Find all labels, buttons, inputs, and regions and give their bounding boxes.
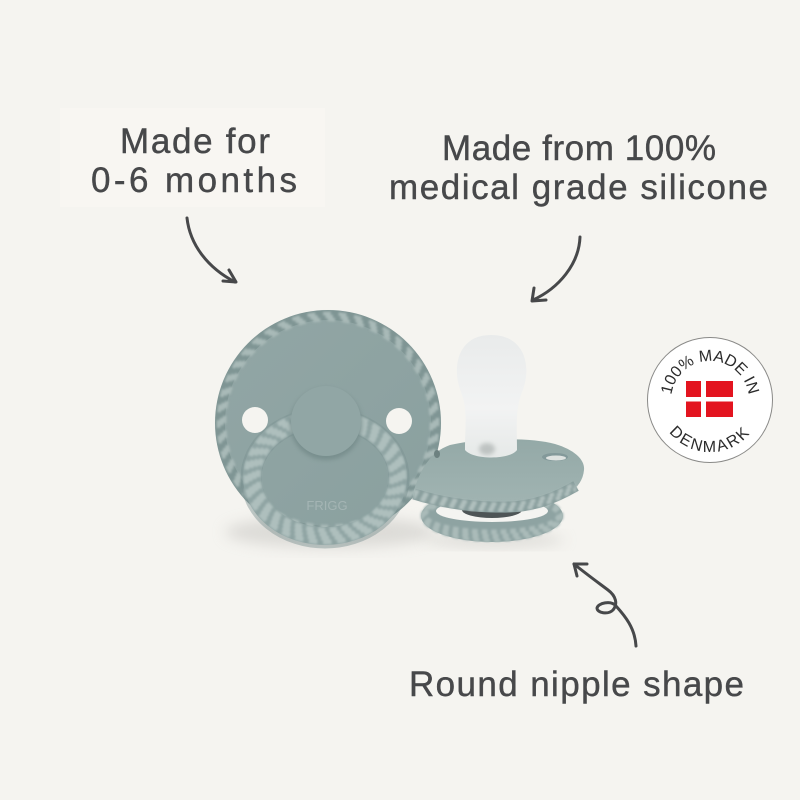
text: round nipple shape: Round nipple shape (409, 665, 744, 704)
arrow: silicone label to pacifier (532, 237, 580, 301)
shadow (425, 533, 565, 547)
text: made from silicone (389, 129, 768, 207)
nipple base shade (479, 443, 495, 455)
badge text: 100% MADE IN (662, 350, 760, 394)
lighter panel behind age label (60, 108, 325, 207)
nipple (457, 335, 526, 458)
badge text: DENMARK (670, 425, 750, 452)
Danish flag (686, 381, 733, 417)
pacifier: front view (215, 310, 441, 548)
ring handle (246, 412, 404, 542)
badge: 100% made in Denmark (647, 337, 773, 463)
disc (215, 310, 441, 536)
logo: FRIGG (306, 498, 348, 513)
badge text (662, 350, 760, 452)
shadow (225, 516, 435, 548)
button (290, 388, 362, 460)
lower ring (421, 490, 563, 542)
rope rim (218, 314, 438, 532)
text: made for 0-6 months: 0-6 months (91, 161, 297, 200)
text: made from silicone: Made from 100% (442, 129, 716, 168)
ventilation holes (242, 407, 268, 433)
arrow: nipple label to pacifier (574, 564, 636, 646)
inner gap (436, 500, 548, 522)
text: made for 0-6 months (91, 122, 297, 200)
text: made from silicone: medical grade silicone (389, 168, 768, 207)
pacifier: side view (413, 335, 584, 547)
shield rope rim (414, 483, 576, 510)
arrow: age label to pacifier (187, 218, 236, 282)
shield (413, 439, 584, 512)
badge circle (648, 338, 772, 462)
text: made for 0-6 months: Made for (120, 122, 270, 161)
shield holes (542, 453, 568, 461)
